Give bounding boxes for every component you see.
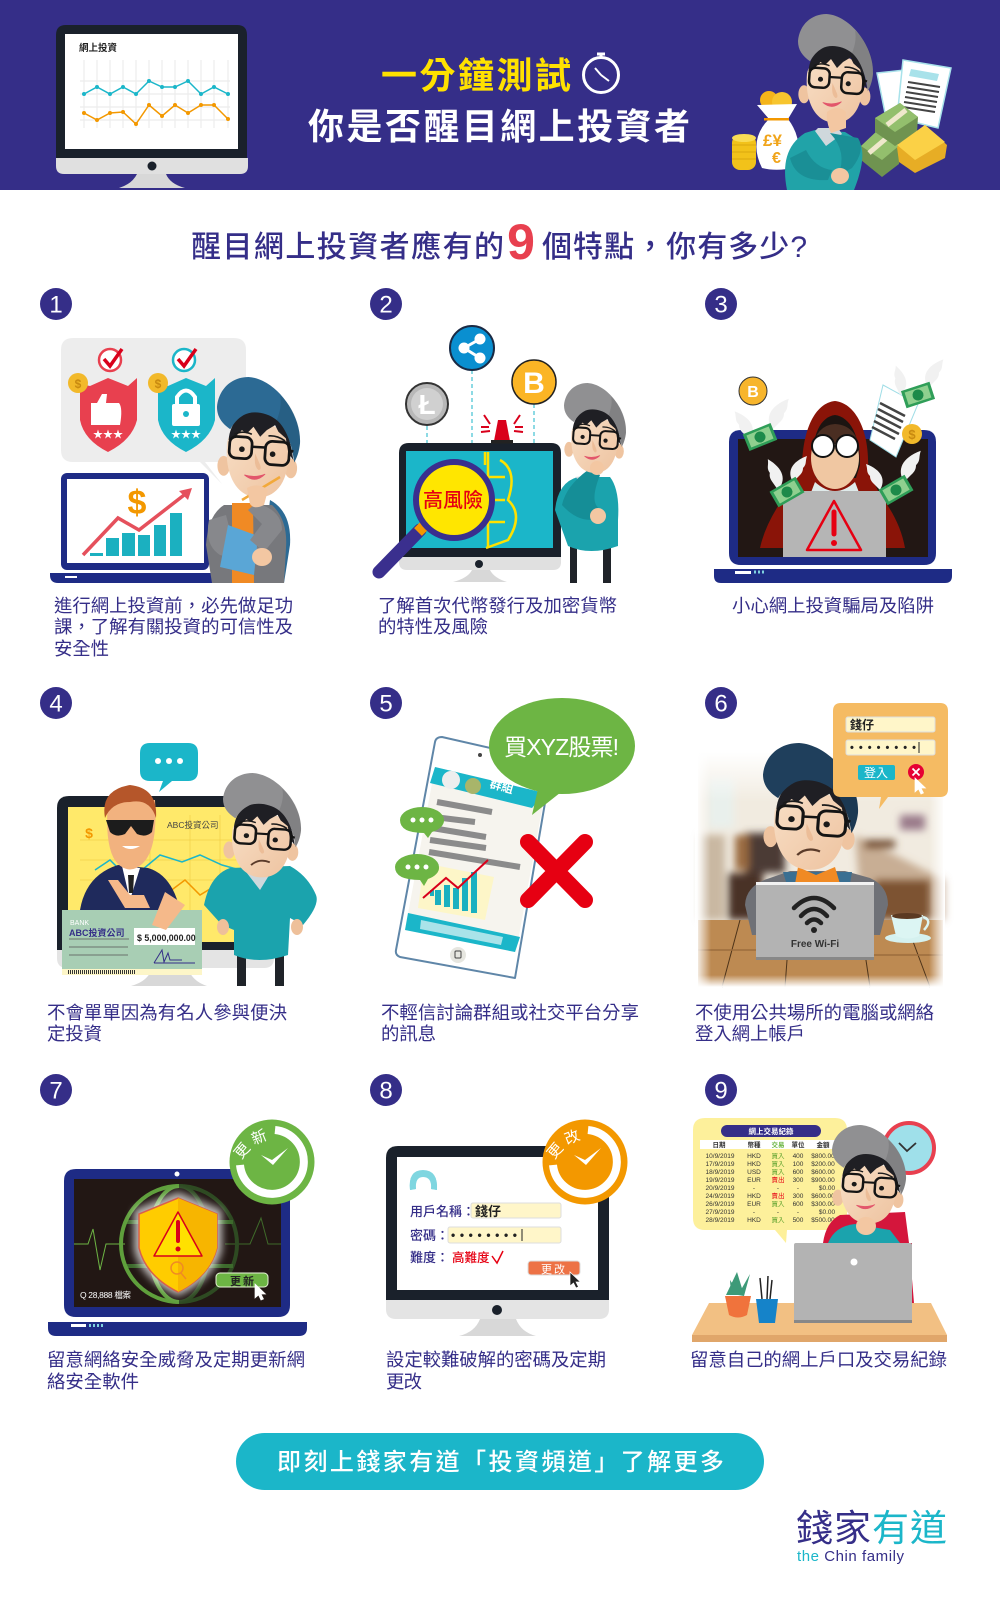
difficulty: 高難度 [452, 1250, 490, 1265]
badge 5: 5 [379, 690, 393, 718]
badge 4 [40, 687, 72, 719]
panel 1: research illustration [50, 338, 300, 583]
transaction record note: - [753, 1209, 755, 1216]
illustration: investor with money [732, 14, 951, 190]
transaction record note: HKD [747, 1217, 761, 1224]
caption 6: 登入網上帳戶 [695, 1023, 805, 1044]
transaction record note: 10/9/2019 [706, 1153, 735, 1160]
desk [692, 1303, 947, 1342]
login box: •••••••• [850, 742, 916, 754]
password field: •••••••• [451, 1228, 517, 1242]
winged cash lower right [866, 451, 921, 505]
username field: 錢仔 [475, 1204, 501, 1219]
transaction record note: 300 [793, 1177, 804, 1184]
caption 8 [386, 1349, 606, 1392]
transaction record note: $300.00 [811, 1201, 835, 1208]
section heading: 個特點，你有多少? [542, 231, 807, 264]
call to action button [236, 1433, 764, 1490]
badge 9 [705, 1074, 737, 1106]
login box [833, 703, 948, 809]
wall clock [884, 1123, 934, 1173]
badge: update green: 新 [249, 1127, 269, 1149]
speech bubble with shields: $ [75, 377, 82, 391]
caption 4: 不會單單因為有名人參與便決 [47, 1002, 287, 1023]
call to action button: 即刻上錢家有道「投資頻道」了解更多 [277, 1449, 724, 1476]
caption 1 [54, 595, 293, 659]
bitcoin token: B [747, 384, 759, 401]
badge 1: 1 [49, 292, 63, 318]
header banner [0, 0, 1000, 190]
red cross [528, 842, 585, 900]
gold coin [902, 424, 922, 444]
section heading: 醒目網上投資者應有的 [191, 231, 504, 264]
caption 2: 了解首次代幣發行及加密貨幣 [378, 595, 617, 616]
badge 1 [40, 288, 72, 320]
username field [410, 1203, 561, 1219]
panel 2: crypto risk illustration [379, 326, 626, 583]
transaction record note: 買入 [772, 1160, 785, 1168]
gold bars [897, 125, 947, 173]
transaction record note: $200.00 [811, 1161, 835, 1168]
login box: 登入 [864, 765, 888, 780]
badge: change orange [542, 1120, 628, 1204]
panel 9: account record illustration [692, 1118, 947, 1342]
badge 2: 2 [379, 292, 393, 318]
cash bundles [861, 103, 918, 177]
laptop [48, 1169, 307, 1336]
logo: the Chin family: 錢家 [796, 1508, 871, 1549]
bank cheque: BANK [70, 920, 89, 927]
caption 3: 小心網上投資騙局及陷阱 [732, 595, 934, 616]
potted plant [725, 1272, 751, 1318]
badge 3 [705, 288, 737, 320]
caption 2: 的特性及風險 [378, 616, 488, 637]
coin stack [732, 134, 756, 170]
bitcoin token [739, 377, 767, 405]
transaction record note: $500.00 [811, 1217, 835, 1224]
laptop with growth chart: $ [128, 484, 147, 522]
speech bubble with shields: ★★★ [93, 430, 123, 441]
badge: update green: 更 [231, 1140, 254, 1162]
panel 3: scam illustration [714, 359, 952, 583]
siren [481, 415, 523, 444]
transaction record note: HKD [747, 1153, 761, 1160]
transaction record note: 單位 [792, 1140, 805, 1149]
panel 7: security software illustration [48, 1120, 314, 1336]
transaction record note: USD [747, 1169, 761, 1176]
smartphone: 群組 [488, 775, 515, 797]
badge 8: 8 [379, 1078, 393, 1104]
pen holder [756, 1276, 778, 1323]
transaction record note: - [797, 1185, 799, 1192]
monitor [57, 796, 274, 986]
panel 5: social media rumour illustration [395, 698, 635, 978]
transaction record note: HKD [747, 1161, 761, 1168]
password field: 密碼： [410, 1228, 449, 1243]
badge 9: 9 [714, 1078, 728, 1104]
transaction record note: 19/9/2019 [706, 1177, 735, 1184]
password field [410, 1227, 561, 1243]
heartbeat line [74, 1229, 125, 1270]
caption 4: 定投資 [47, 1023, 102, 1044]
title line 2: 你是否醒目網上投資者 [308, 106, 690, 147]
transaction record note: 賣出 [772, 1191, 784, 1200]
ripple coin [450, 326, 494, 370]
transaction record note: 100 [793, 1161, 804, 1168]
money bag: € [772, 150, 781, 167]
speech bubble with shields: $ [155, 377, 162, 391]
stock papers [877, 60, 951, 128]
speech bubble with shields: ★★★ [171, 430, 201, 441]
transaction record note: - [797, 1209, 799, 1216]
laptop with wifi [756, 882, 874, 960]
transaction record note: 600 [793, 1169, 804, 1176]
caption 6 [695, 1002, 934, 1044]
magnifying glass: 高風險 [423, 489, 483, 512]
laptop back [794, 1243, 912, 1323]
hooded hacker [760, 401, 905, 548]
transaction record note: 交易 [772, 1140, 784, 1149]
chat bubble [140, 743, 198, 792]
transaction record note: $0.00 [819, 1209, 836, 1216]
transaction record note: 18/9/2019 [706, 1169, 735, 1176]
badge 8 [370, 1074, 402, 1106]
warning shield [134, 1192, 222, 1296]
icon: stopwatch [584, 54, 618, 92]
caption 7 [47, 1349, 305, 1392]
businessman with sunglasses [80, 785, 180, 910]
caption 4 [47, 1002, 287, 1044]
green speech bubble: 買XYZ股票! [504, 734, 619, 760]
caption 1: 進行網上投資前，必先做足功 [54, 595, 293, 616]
transaction record note: $600.00 [811, 1169, 835, 1176]
gold coin: $ [908, 427, 916, 442]
user avatar [410, 1168, 437, 1192]
badge 6: 6 [714, 690, 728, 718]
caption 9: 留意自己的網上戶口及交易紀錄 [690, 1349, 947, 1370]
change button [528, 1261, 580, 1288]
title line 1: 一分鐘測試 [381, 55, 571, 96]
panel 6: public wifi illustration [695, 703, 948, 987]
transaction record note: HKD [747, 1193, 761, 1200]
caption 6: 不使用公共場所的電腦或網絡 [695, 1002, 934, 1023]
bank cheque: $ 5,000,000.00 [137, 933, 196, 943]
transaction record note: 幣種 [748, 1140, 761, 1149]
caption 5: 的訊息 [381, 1023, 436, 1044]
coffee cup [885, 913, 931, 943]
flying document [870, 385, 918, 457]
small chat bubble lower [395, 854, 439, 886]
update button: 更新 [230, 1274, 254, 1288]
litecoin [406, 383, 448, 425]
bitcoin coin: B [523, 367, 545, 400]
panel 8: password illustration [386, 1120, 628, 1336]
logo: the Chin family: 有道 [872, 1508, 947, 1549]
litecoin: Ł [418, 389, 436, 420]
green speech bubble [489, 698, 635, 815]
transaction record note: 買入 [772, 1216, 785, 1224]
bank cheque [62, 892, 202, 975]
transaction record note: 26/9/2019 [706, 1201, 735, 1208]
caption 1: 課，了解有關投資的可信性及 [54, 616, 293, 637]
login box: 錢仔 [850, 717, 874, 732]
badge 5 [370, 687, 402, 719]
transaction record note: EUR [747, 1177, 761, 1184]
badge 6 [705, 687, 737, 719]
caption 7: 留意網絡安全威脅及定期更新網 [47, 1349, 305, 1370]
monitor [386, 1146, 609, 1336]
badge 7 [40, 1074, 72, 1106]
worried character [204, 773, 317, 986]
icon: desktop monitor with line chart: 網上投資 [79, 42, 118, 54]
difficulty: 難度： [410, 1250, 449, 1265]
laptop [714, 430, 952, 583]
transaction record note: 500 [793, 1217, 804, 1224]
caption 8: 更改 [386, 1371, 422, 1392]
badge: update green [230, 1120, 314, 1204]
caption 2 [378, 595, 617, 637]
transaction record note: 網上交易紀錄 [748, 1126, 794, 1136]
transaction record note: 買入 [772, 1168, 785, 1176]
laptop with wifi: Free Wi-Fi [791, 939, 839, 950]
bank cheque: ABC投資公司 [69, 927, 124, 938]
small chat bubble upper [400, 807, 444, 838]
transaction record note: 24/9/2019 [706, 1193, 735, 1200]
transaction record note: $800.00 [811, 1153, 835, 1160]
character at laptop [745, 743, 888, 935]
laptop with growth chart [50, 473, 214, 583]
transaction record note: - [777, 1209, 779, 1216]
badge 2 [370, 288, 402, 320]
globe [121, 1186, 237, 1302]
transaction record note: 買入 [772, 1200, 785, 1208]
smartphone [396, 737, 552, 978]
caption 8: 設定較難破解的密碼及定期 [386, 1349, 606, 1370]
transaction record note: 買入 [772, 1152, 785, 1160]
money bag: £¥ [763, 131, 782, 150]
transaction record note: 27/9/2019 [706, 1209, 735, 1216]
transaction record note: 600 [793, 1201, 804, 1208]
caption 1: 安全性 [54, 638, 109, 659]
caption 5: 不輕信討論群組或社交平台分享 [381, 1002, 639, 1023]
cafe background [695, 752, 945, 987]
money bag [756, 91, 799, 170]
section heading [191, 214, 807, 270]
monitor: $ [85, 825, 93, 841]
speech bubble with shields [61, 338, 246, 484]
transaction record note: 300 [793, 1193, 804, 1200]
magnifying glass [379, 462, 492, 572]
transaction record note: 20/9/2019 [706, 1185, 735, 1192]
student character [206, 377, 300, 583]
transaction record note: 賣出 [772, 1175, 784, 1184]
character with chair [823, 1125, 914, 1303]
transaction record note: 400 [793, 1153, 804, 1160]
transaction record note: 日期 [712, 1140, 726, 1149]
difficulty [410, 1250, 503, 1265]
winged cash top right [887, 359, 943, 408]
badge 4: 4 [49, 690, 63, 718]
transaction record note: EUR [747, 1201, 761, 1208]
badge 3: 3 [714, 292, 728, 318]
winged cash top left [735, 399, 789, 451]
change button: 更改 [541, 1262, 565, 1276]
icon: desktop monitor with line chart [56, 25, 248, 188]
character [555, 383, 626, 583]
transaction record note: - [777, 1185, 779, 1192]
winged cash lower left [763, 456, 807, 507]
badge: change orange: 更 [544, 1140, 567, 1162]
transaction record note: $600.00 [811, 1193, 835, 1200]
computer with warning [783, 491, 886, 557]
transaction record note: 28/9/2019 [706, 1217, 735, 1224]
transaction record note [693, 1118, 847, 1243]
caption 5 [381, 1002, 639, 1044]
username field: 用戶名稱： [410, 1204, 475, 1219]
logo: the Chin family [796, 1508, 947, 1565]
transaction record note: $900.00 [811, 1177, 835, 1184]
caption 7: 絡安全軟件 [47, 1371, 139, 1392]
panel 4: celebrity endorsement illustration [57, 743, 317, 986]
transaction record note: 金額 [816, 1140, 830, 1149]
section heading: 9 [507, 214, 535, 270]
monitor: ABC投資公司 [167, 820, 218, 830]
monitor [399, 443, 561, 582]
sweater [785, 130, 862, 190]
logo: the Chin family: the Chin family [797, 1548, 904, 1565]
update button [216, 1273, 268, 1300]
bitcoin coin [512, 360, 556, 404]
badge 7: 7 [49, 1078, 63, 1104]
transaction record note: - [753, 1185, 755, 1192]
scan count: Q 28,888 檔案 [80, 1290, 131, 1300]
badge: change orange: 改 [562, 1127, 582, 1149]
transaction record note: $0.00 [819, 1185, 836, 1192]
transaction record note: 17/9/2019 [706, 1161, 735, 1168]
dashed connector lines [427, 370, 534, 443]
